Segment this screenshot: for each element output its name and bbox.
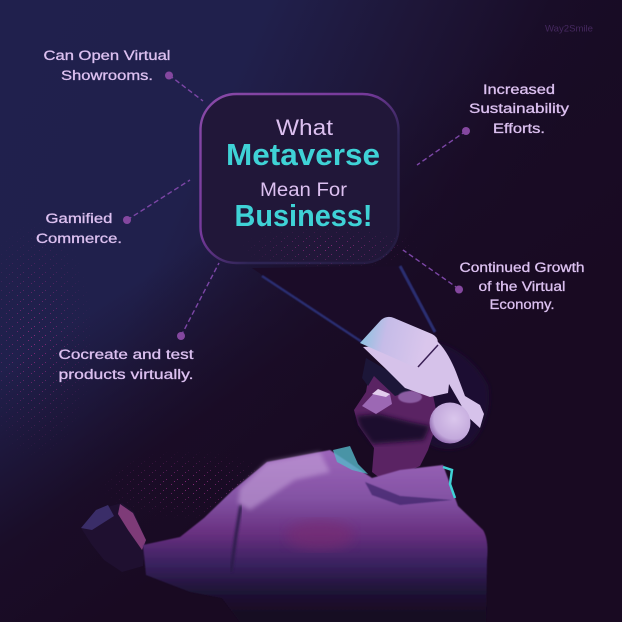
hand highlight: [118, 504, 146, 550]
hair: [424, 342, 489, 449]
collar shadow: [365, 482, 452, 505]
callout: cocreate: products virtually.: [58, 367, 194, 382]
title: Metaverse: [226, 137, 380, 172]
title: Mean For: [260, 180, 348, 201]
beam of light from headset: [252, 266, 438, 344]
magenta speckle texture: [1, 229, 409, 518]
callout: sustainability: [417, 82, 569, 165]
headphone ear cup: [430, 402, 470, 444]
back glow: [286, 520, 354, 550]
callout: gamified commerce: [36, 180, 190, 246]
callout: gamified commerce: Commerce.: [36, 231, 122, 246]
callout: showrooms: [44, 48, 203, 101]
shoulder highlight: [238, 452, 330, 510]
cheek highlight: [398, 391, 422, 403]
callout: cocreate: [58, 263, 219, 382]
callout: virtual economy: [403, 250, 584, 312]
hand: [81, 503, 146, 572]
visor edge: [418, 345, 438, 367]
callout: sustainability: Sustainability: [469, 101, 569, 116]
hand upper shade: [81, 505, 114, 530]
neckline teal: [333, 446, 368, 474]
hoodie and arm: [143, 450, 488, 622]
title: [226, 115, 380, 233]
central callout box: [200, 94, 398, 263]
callout: showrooms: Showrooms.: [61, 68, 153, 83]
person with VR headset: [81, 317, 489, 622]
title: What: [276, 115, 334, 140]
jaw shadow: [356, 414, 430, 444]
neck and face: [354, 368, 438, 482]
callout: virtual economy: of the Virtual: [478, 279, 566, 294]
sleeve fold: [231, 505, 241, 572]
headset strap: [363, 342, 484, 428]
watermark: Way2Smile: [545, 24, 593, 34]
callout: cocreate: Cocreate and test: [58, 347, 194, 362]
callout: virtual economy: Economy.: [490, 297, 554, 312]
teeth: [372, 389, 390, 397]
smile: [362, 391, 392, 414]
headset visor: [360, 317, 438, 366]
callout: sustainability: Efforts.: [493, 121, 545, 136]
collar teal edge: [443, 467, 455, 498]
callout: showrooms: Can Open Virtual: [44, 48, 170, 63]
callout: gamified commerce: Gamified: [46, 211, 112, 226]
title: Business!: [234, 198, 372, 233]
callout: virtual economy: Continued Growth: [460, 260, 584, 275]
callout: sustainability: Increased: [483, 82, 555, 97]
glasses shadow and brow: [362, 358, 418, 396]
